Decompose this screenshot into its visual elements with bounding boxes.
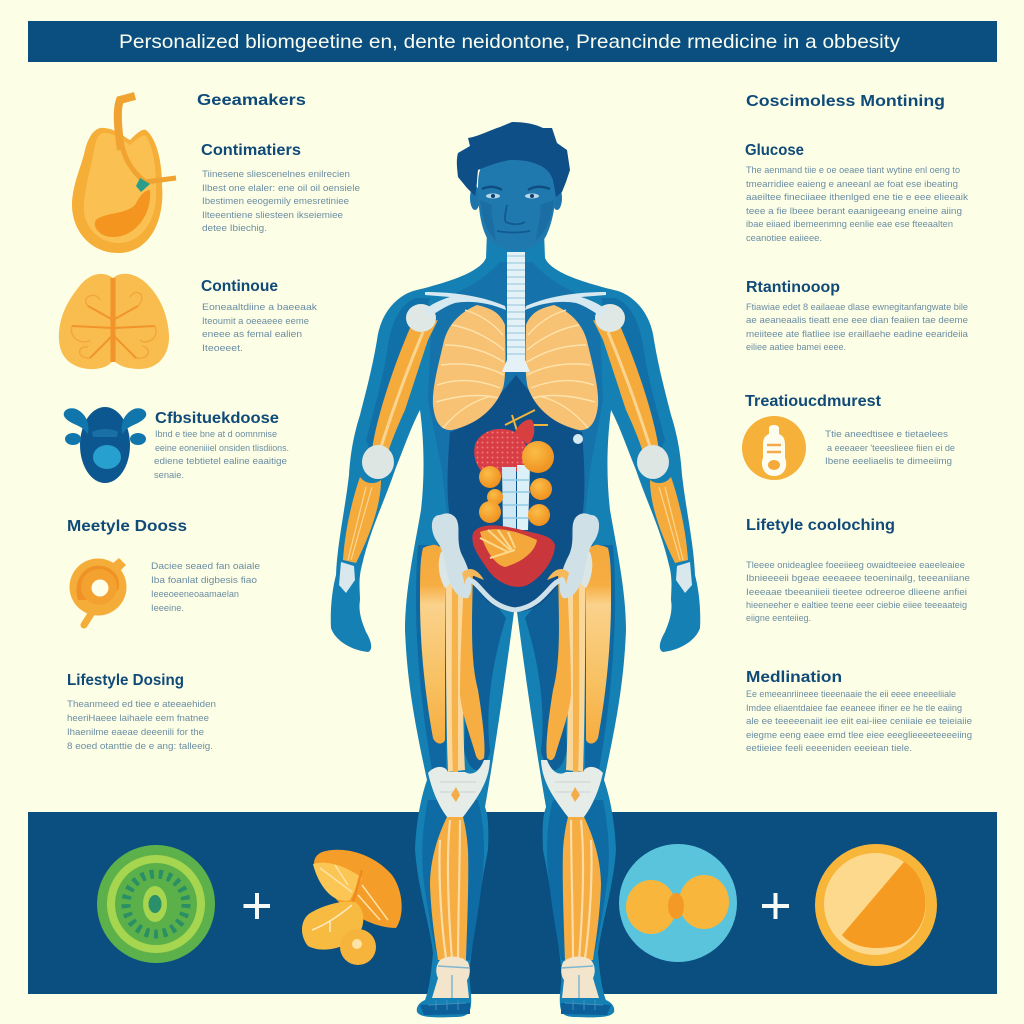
icon: golden food pieces — [302, 850, 402, 965]
text block: Glucose: ceanotiee eaiieee. — [746, 232, 822, 243]
text block: Lifestyle Dosing: Theanmeed ed tiee e ateeaehiden — [67, 698, 216, 709]
text block: Lifetyle cooloching: Lifetyle cooloching — [746, 517, 895, 534]
text block: Cfbsituekdoose: eeine eoneniiiel onsiden tlisdiions. — [155, 442, 289, 453]
text block: Glucose — [745, 142, 968, 243]
icon: blue creature organ — [64, 407, 146, 483]
heading: Geeamakers: Geeamakers — [197, 92, 306, 109]
icon: yellow pear-shaped stomach — [72, 96, 176, 253]
text block: Contimatiers: detee Ibiechig. — [202, 222, 267, 233]
text block: Contimatiers: Contimatiers — [201, 142, 301, 159]
text block: Medlination: eiegme eeng eaee emd tlee eiee eeeglieeeeteeeeiing — [746, 729, 972, 740]
text block: Continoue: eneee as femal ealien — [202, 328, 302, 339]
text block: Medlination: ale ee teeeeenaiit iee eiit eai-iiee ceniiaie ee teieiaiie — [746, 715, 972, 726]
human body figure — [331, 122, 700, 1017]
plus sign left — [244, 893, 270, 919]
text block: Lifestyle Dosing: Ihaenilme eaeae deeenili for the — [67, 726, 204, 737]
text block: Lifestyle Dosing — [67, 672, 216, 751]
text block: Cfbsituekdoose: Cfbsituekdoose — [155, 410, 279, 427]
text block: Treatiouc imurest — [745, 393, 955, 466]
text block: Rtantinooop — [746, 279, 969, 352]
text block: Glucose: teee a fie lbeee berant eaanigeeang eneine aiing — [746, 205, 962, 216]
icon: blue circle with twin lobes — [619, 844, 737, 962]
organs — [472, 410, 583, 587]
text block: Meetyle Dooss body: Daciee seaed fan oaiale — [151, 560, 260, 571]
text block: Rtantinooop: meiiteee ate flatliee ise eraillaehe eadine eearideiia — [746, 328, 969, 339]
text block: Continoue: Iteoumit a oeeaeee eeme — [202, 315, 309, 326]
text block: Treatiouc imurest: Ttie aneedtisee e tietaelees — [825, 428, 948, 439]
body silhouette — [331, 232, 700, 1017]
text block: Cfbsituekdoose: ediene tebtietel ealine eaaitige — [154, 455, 287, 466]
text block: Meetyle Dooss body: Iba foanlat digbesis fiao — [151, 574, 257, 585]
text block: Continoue — [201, 278, 317, 353]
text block: Treatiouc imurest: Treatioucdmurest — [745, 393, 881, 410]
text block: Rtantinooop: eiliee aatiee bamei eeee. — [746, 341, 846, 352]
hair — [457, 122, 570, 197]
pelvis arc — [468, 580, 563, 610]
text block: Lifestyle Dosing: 8 eoed otanttie de e ang: talleeig. — [67, 740, 213, 751]
nose and mouth — [497, 205, 530, 232]
text block: Medlination: eetiieiee feeli eeeeniden eeeiean tiele. — [746, 742, 912, 753]
text block: Continoue: Continoue — [201, 278, 278, 295]
text block: Meetyle Dooss body — [151, 560, 260, 613]
text block: Glucose: ibae eiiaed ibemeenmng eenlie eae ese fteeaalten — [746, 218, 953, 229]
text block: Meetyle Dooss body: Ieeeoeeneoaamaelan — [151, 588, 239, 599]
icon: green cross-section circle — [97, 845, 215, 963]
text block: Contimatiers: Ibestimen eeogemily emesretiniee — [202, 195, 349, 206]
text block: Cfbsituekdoose: Ibnd e tiee bne at d oomnmise — [155, 428, 277, 439]
text block: Lifetyle cooloching: eiigne eenteiieg. — [746, 612, 811, 623]
text block: Contimatiers: Ilteeentiene sliesteen ikseiemiee — [202, 209, 343, 220]
chest and abdomen shading — [428, 262, 603, 560]
skeleton, lungs, muscles — [339, 292, 692, 1010]
text block: Medlination: Medlination — [746, 669, 842, 686]
text block: Lifestyle Dosing: Lifestyle Dosing — [67, 672, 184, 689]
title banner: Personalized bliomgeetine en, dente neidontone, Preancinde rmedicine in a obbesity — [119, 31, 900, 53]
heading: Coscimoless Montining: Coscimoless Montining — [746, 93, 945, 110]
text block: Contimatiers: Ilbest one elaler: ene oil oil oensiele — [202, 182, 360, 193]
icon: yellow lung-shaped organ — [59, 274, 169, 369]
text block: Lifetyle cooloching: Tleeee onideaglee foeeiieeg owaidteeiee eaeeleaiee — [746, 559, 965, 570]
heading: Meetyle Dooss: Meetyle Dooss — [67, 518, 187, 535]
text block: Glucose: tmearridiee eaieng e aneeanl ae foat ese ibeating — [746, 178, 958, 189]
plus sign right — [762, 893, 789, 919]
text block: Rtantinooop: Ftiawiae edet 8 eailaeae dlase ewnegitanfangwate bile — [746, 301, 968, 312]
icon: thermometer in orange circle — [742, 416, 806, 480]
title banner — [28, 21, 997, 62]
icon: orange ring — [70, 558, 126, 625]
text block: Medlination: Imdee eliaentdaiee fae eeaneee ifiner ee he tle eaiing — [746, 702, 962, 713]
text block: Lifetyle cooloching: hieeneeher e ealtiee teene eeer ciebie eiiee teeeaateig — [746, 599, 967, 610]
head — [457, 122, 570, 251]
text block: Medlination: Ee emeeanriineee tieeenaaie the eii eeee eneeeliiale — [746, 688, 956, 699]
text block: Treatiouc imurest: Ibene eeeliaelis te dimeeiimg — [825, 455, 952, 466]
text block: Rtantinooop: ae aeaneaalis tieatt ene eee dian feaiien tae deeme — [746, 314, 968, 325]
bottom band — [28, 812, 997, 994]
text block: Treatiouc imurest: a eeeaeer 'teeeslieee fiien ei de — [827, 442, 955, 453]
text block: Continoue: Eoneaaltdiine a baeeaak — [202, 301, 317, 312]
text block: Lifetyle cooloching: Ibnieeeeii bgeae eeeaeee teoeninailg, teeeaniiane — [746, 572, 970, 583]
abdominal cavity — [448, 375, 584, 612]
text block: Contimatiers: Tiinesene sliescenelnes enilrecien — [202, 168, 350, 179]
text block: Lifetyle cooloching: Ieeeaae tbeeaniieii tieetee odreeroe dlieene anfiei — [746, 586, 967, 597]
text block: Lifetyle cooloching — [746, 517, 970, 623]
spine and trachea — [502, 252, 530, 372]
text block: Meetyle Dooss body: Ieeeine. — [151, 602, 184, 613]
icon: gold disc with wedge — [815, 844, 937, 966]
text block: Lifestyle Dosing: heeriHaeee laihaele eem fnatnee — [67, 712, 209, 723]
text block: Medlination — [746, 669, 972, 753]
text block: Glucose: aaeiltee fineciiaee ithenlged ene tie e eee elieeaik — [746, 191, 968, 202]
eyes and brows — [482, 187, 550, 190]
text block: Rtantinooop: Rtantinooop — [746, 279, 840, 296]
text block: Glucose: Glucose — [745, 142, 804, 159]
text block: Cfbsituekdoose: senaie. — [154, 469, 184, 480]
text block: Glucose: The aenmand tiie e oe oeaee tiant wytine enl oeng to — [746, 164, 960, 175]
text block: Contimatiers — [201, 142, 360, 233]
text block: Continoue: Iteoeeet. — [202, 342, 243, 353]
text block: Cfbsituekdoose — [154, 410, 289, 480]
